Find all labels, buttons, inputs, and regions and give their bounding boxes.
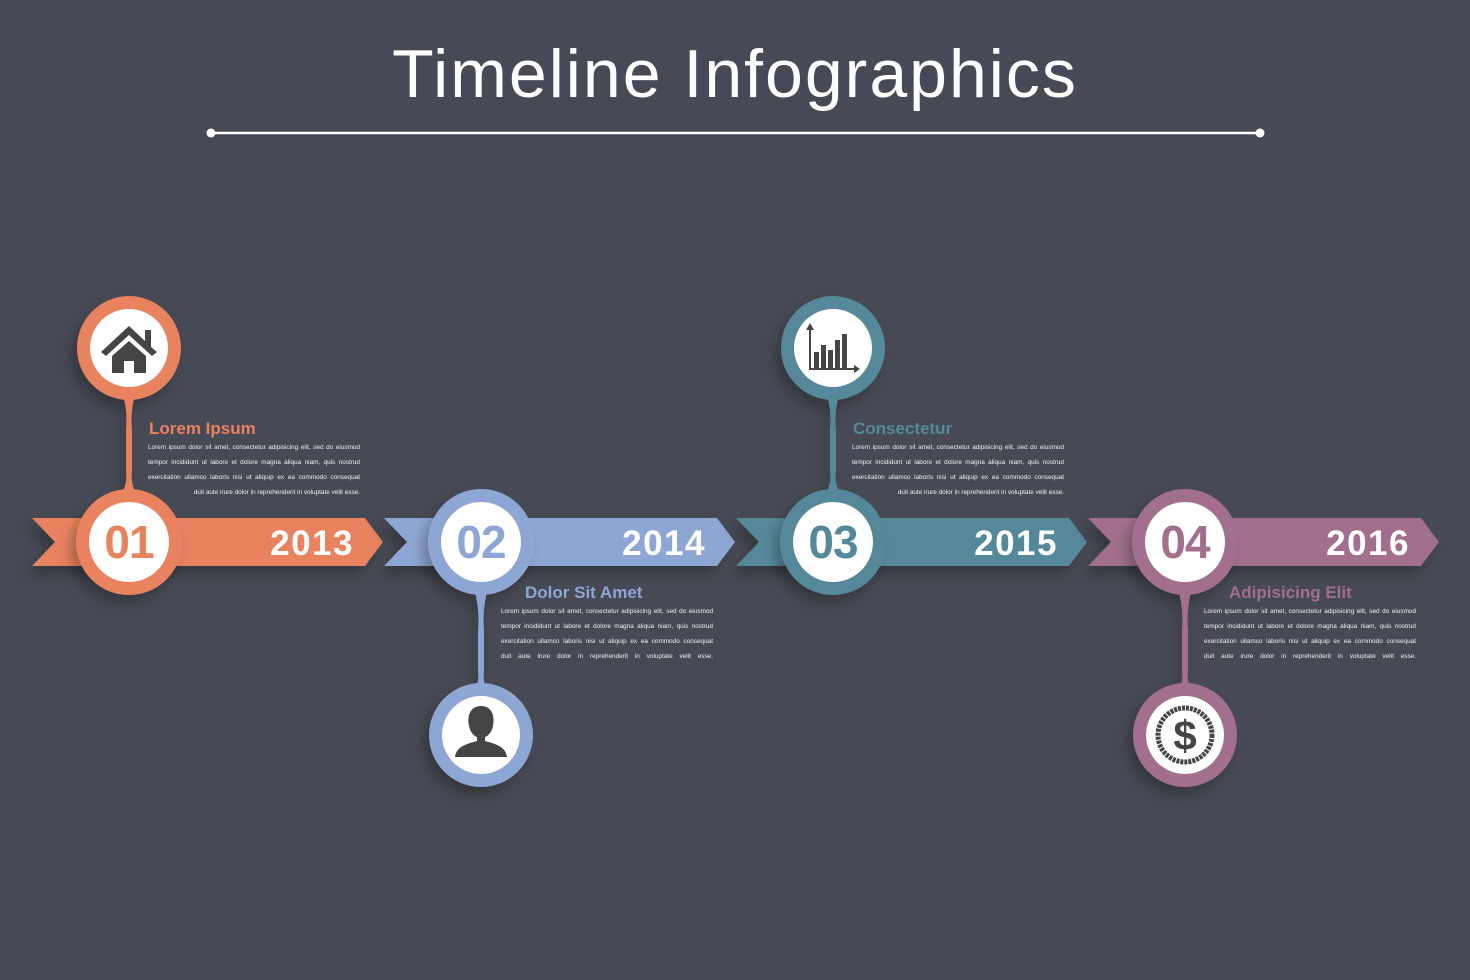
years: 2014 xyxy=(622,524,706,563)
text block 2: duit aute irure dolor in reprehenderit in voluptate velit esse. xyxy=(501,653,713,660)
milestone 1: 01 xyxy=(104,516,154,568)
text block 3: duit aute irure dolor in reprehenderit in voluptate velit esse. xyxy=(898,489,1064,496)
text block 3: exercitation ullamco laboris nisi ut aliquip ex ea commodo consequat xyxy=(852,474,1064,481)
icon: dollar coin xyxy=(1158,708,1212,762)
icon: bar chart xyxy=(806,323,860,373)
milestone 3 xyxy=(780,296,886,595)
milestone 3: 03 xyxy=(808,516,858,568)
text block 3: Lorem ipsum dolor sit amet, consectetur adipisicing elit, sed do eiusmod xyxy=(852,444,1064,451)
ribbon 4 xyxy=(1088,518,1439,566)
text block 4: Lorem ipsum dolor sit amet, consectetur adipisicing elit, sed do eiusmod xyxy=(1204,608,1416,615)
text block 2: tempor incididunt ut labore et dolore magna aliqua niam, quis nostrud xyxy=(501,623,713,630)
title: Timeline Infographics xyxy=(392,36,1078,112)
text block 2 xyxy=(501,608,713,660)
ribbon 1 xyxy=(32,518,383,566)
years: 2013 xyxy=(270,524,354,563)
milestone 4: 04 xyxy=(1160,516,1211,568)
text block 1: Lorem ipsum dolor sit amet, consectetur adipisicing elit, sed do eiusmod xyxy=(148,444,360,451)
icon: dollar coin: $ xyxy=(1173,712,1197,759)
text block 2: Lorem ipsum dolor sit amet, consectetur adipisicing elit, sed do eiusmod xyxy=(501,608,713,615)
milestone 2: 02 xyxy=(456,516,506,568)
milestone 2 xyxy=(428,489,534,787)
title underline xyxy=(206,128,1264,138)
text block 4: exercitation ullamco laboris nisi ut aliquip ex ea commodo consequat xyxy=(1204,638,1416,645)
heading 1: Lorem Ipsum xyxy=(149,419,256,438)
text block 4: tempor incididunt ut labore et dolore magna aliqua niam, quis nostrud xyxy=(1204,623,1416,630)
years: 2015 xyxy=(974,524,1058,563)
text block 2: exercitation ullamco laboris nisi ut aliquip ex ea commodo consequat xyxy=(501,638,713,645)
text block 4 xyxy=(1204,608,1416,660)
icon: house xyxy=(101,326,157,373)
text block 1: exercitation ullamco laboris nisi ut aliquip ex ea commodo consequat xyxy=(148,474,360,481)
ribbon 3 xyxy=(736,518,1087,566)
heading 3: Consectetur xyxy=(853,419,952,438)
text block 3 xyxy=(852,444,1064,496)
text block 4: duit aute irure dolor in reprehenderit in voluptate velit esse. xyxy=(1204,653,1416,660)
icon: person xyxy=(455,706,507,757)
heading 4: Adipisicing Elit xyxy=(1229,583,1352,602)
milestone 4 xyxy=(1132,489,1238,787)
text block 1: tempor incididunt ut labore et dolore magna aliqua niam, quis nostrud xyxy=(148,459,360,466)
ribbon 2 xyxy=(384,518,735,566)
years: 2016 xyxy=(1326,524,1410,563)
text block 1 xyxy=(148,444,360,496)
heading 2: Dolor Sit Amet xyxy=(525,583,642,602)
text block 3: tempor incididunt ut labore et dolore magna aliqua niam, quis nostrud xyxy=(852,459,1064,466)
text block 1: duit aute irure dolor in reprehenderit in voluptate velit esse. xyxy=(194,489,360,496)
milestone 1 xyxy=(76,296,182,595)
years xyxy=(270,524,1410,563)
